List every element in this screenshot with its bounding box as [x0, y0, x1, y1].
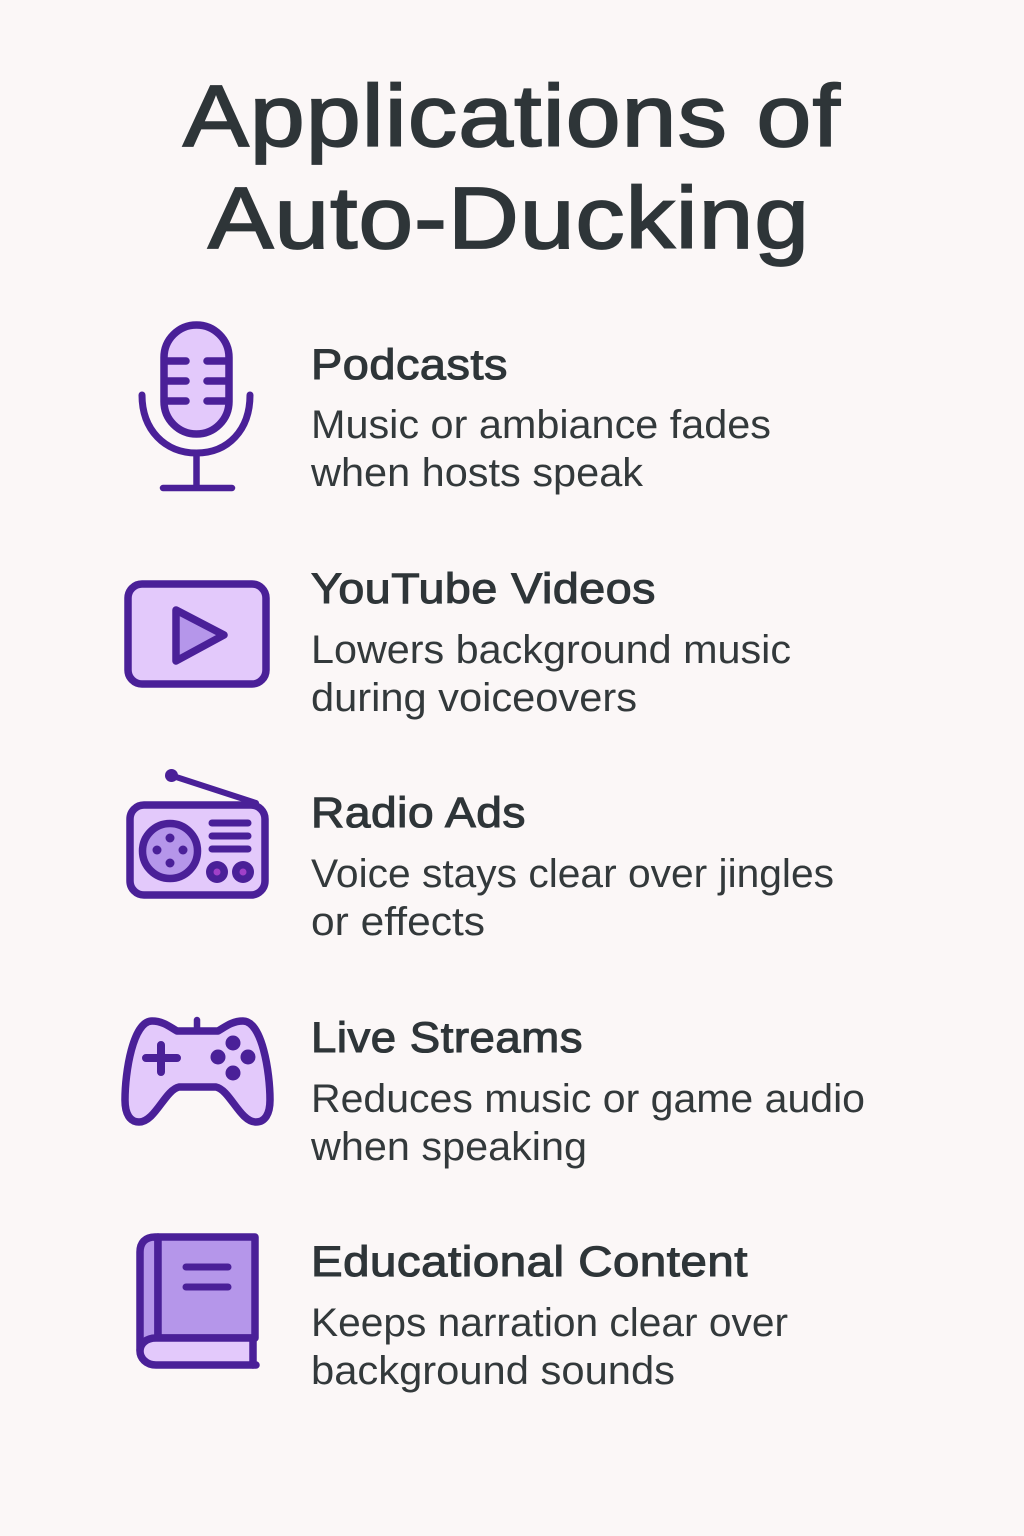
- text: radio ads: Radio Ads: [311, 789, 526, 837]
- text: radio ads: Voice stays clear over jingles: [311, 852, 834, 896]
- text: radio ads: or effects: [311, 900, 485, 944]
- text: live streams: Live Streams: [311, 1014, 583, 1062]
- text: educational content: background sounds: [311, 1349, 675, 1393]
- text: youtube videos: [311, 565, 791, 720]
- text: youtube videos: YouTube Videos: [311, 565, 656, 613]
- title: Auto-Ducking: [208, 170, 810, 267]
- text: live streams: [310, 1014, 865, 1169]
- panel: podcasts: [142, 325, 771, 495]
- panel: live streams: [125, 1014, 865, 1169]
- text: youtube videos: during voiceovers: [311, 676, 637, 720]
- title: Applications of: [183, 68, 841, 165]
- text: youtube videos: Lowers background music: [311, 628, 791, 672]
- icon: radio: [130, 769, 265, 895]
- text: educational content: Keeps narration clear over: [311, 1301, 788, 1345]
- icon: microphone: [142, 325, 250, 488]
- text: live streams: when speaking: [310, 1125, 587, 1169]
- text: podcasts: Music or ambiance fades: [311, 403, 771, 447]
- text: podcasts: Podcasts: [311, 341, 508, 389]
- text: educational content: Educational Content: [311, 1238, 748, 1286]
- panel: radio ads: [130, 769, 834, 944]
- panel: educational content: [140, 1237, 788, 1393]
- text: radio ads: [311, 789, 834, 944]
- icon: video player: [128, 584, 266, 684]
- text: podcasts: [310, 341, 771, 495]
- icon: game controller: [125, 1020, 270, 1122]
- panel: youtube videos: [128, 565, 791, 720]
- title: [183, 68, 841, 267]
- icon: book: [140, 1237, 256, 1365]
- text: educational content: [311, 1238, 788, 1393]
- text: live streams: Reduces music or game audio: [311, 1077, 865, 1121]
- text: podcasts: when hosts speak: [310, 451, 644, 495]
